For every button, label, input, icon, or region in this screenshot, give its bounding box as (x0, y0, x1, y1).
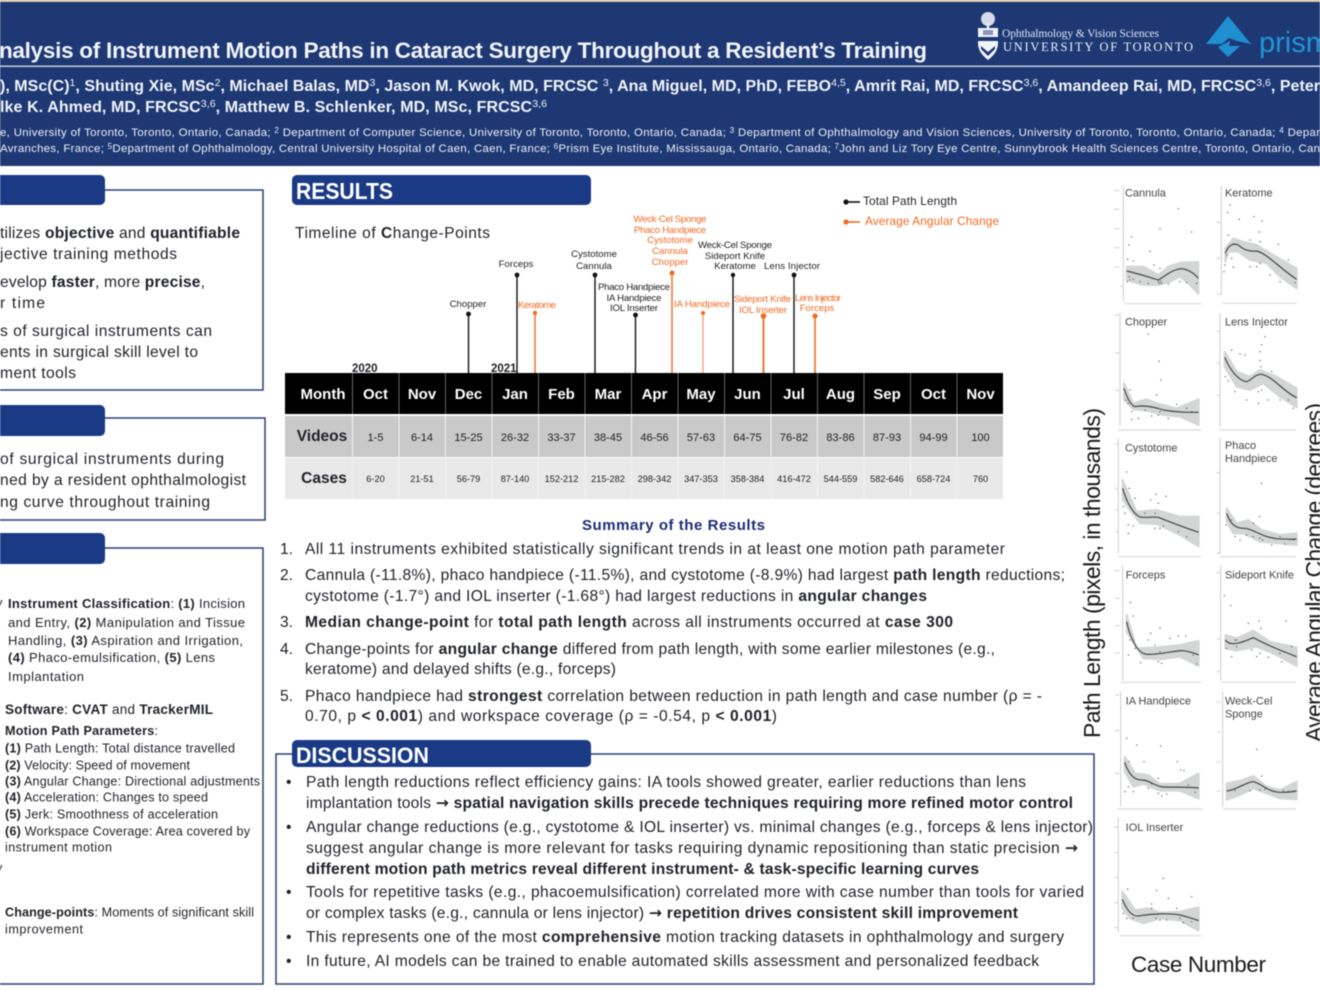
videos row: 76-82 (780, 432, 808, 444)
marker: cystotome and cannula: Cystotome (571, 249, 617, 260)
marker: cystotome and cannula (571, 249, 617, 373)
videos row: Videos (297, 428, 347, 445)
marker: weck-cel sponge, sideport knife, keratome: Keratome (714, 261, 756, 272)
authors: 3 (603, 77, 609, 89)
logo: University of Toronto (978, 12, 1193, 60)
month row: Nov (966, 386, 995, 403)
bullet: path length: • (286, 774, 291, 791)
month row: Aug (826, 386, 855, 403)
authors: , Shuting Xie, MSc (75, 78, 215, 95)
videos row: 94-99 (919, 432, 948, 444)
videos row (297, 428, 990, 445)
item 1: 1. (280, 541, 293, 558)
chart: forceps (1115, 565, 1202, 682)
item 5: 0.70, p < 0.001) and workspace coverage (ρ = -0.54, p < 0.001) (305, 708, 777, 725)
chart: IOL inserter: IOL Inserter (1126, 822, 1184, 834)
small multiple charts: lower (1114, 565, 1297, 936)
chart: phaco handpiece (1217, 438, 1297, 557)
marker: forceps: Forceps (499, 259, 534, 270)
chart: chopper (1115, 313, 1202, 430)
chart: phaco handpiece: Phaco (1225, 440, 1256, 452)
authors: , Amandeep Rai, MD, FRCSC (1038, 78, 1257, 95)
timeline table (285, 373, 1003, 499)
marker: weck-cel sponge, sideport knife, keratome (698, 240, 772, 373)
item 1: All 11 instruments exhibited statistically significant trends in at least one motion path parameter (305, 541, 1005, 558)
marker: weck-cel sponge, sideport knife, keratome: Sideport Knife (705, 251, 765, 262)
videos row: 83-86 (826, 432, 855, 444)
authors: , Matthew B. Schlenker, MD, MSc, FRCSC (216, 99, 533, 116)
chart: forceps: Forceps (1126, 569, 1166, 581)
marker: phaco handpiece, IA handpiece, IOL inserter (598, 282, 670, 373)
cases row: 416-472 (777, 474, 811, 484)
motion path parameters: instrument motion (5, 840, 112, 854)
authors: 3,6 (1256, 77, 1271, 89)
affiliations: 2 (274, 126, 279, 135)
axis label: case number: Case Number (1131, 952, 1266, 977)
bullet: angular change: suggest angular change is more relevant for tasks requiring dynamic repositioning than static precision → (306, 839, 1078, 857)
panel: objective (0, 405, 265, 520)
item 4: keratome) and delayed shifts (e.g., forceps) (305, 661, 616, 678)
affiliations: Prism Eye Institute, Mississauga, Ontario, Canada; (558, 143, 834, 155)
chart: weck-cel sponge (1217, 692, 1297, 809)
bullet: path length (286, 774, 1073, 812)
marker: keratome angular: Keratome (518, 300, 556, 311)
marker: angular stack: Cystotome (647, 235, 693, 246)
affiliations: 6 (554, 142, 559, 151)
cases row: 56-79 (457, 474, 480, 484)
affiliations: Department of Ophthalmology and Vision Sciences, University of Toronto, Toronto, Ontario, Canada; (735, 127, 1279, 139)
marker: chopper: Chopper (450, 299, 487, 310)
change-points definition (0, 861, 254, 936)
videos row: 1-5 (368, 432, 383, 444)
cases row: 215-282 (591, 474, 625, 484)
chart: cystotome (1115, 438, 1202, 557)
chart: keratome (1217, 186, 1297, 303)
authors (0, 77, 1320, 116)
bullet: repetition (286, 884, 1084, 922)
affiliations: Department of Ophthalmology, Central University Hospital of Caen, Caen, France; (112, 143, 553, 155)
motion path parameters: (4) Acceleration: Changes to speed (5, 790, 208, 804)
bullet: future: In future, AI models can be trained to enable automated skills assessment and personalized feedback (306, 953, 1039, 970)
item 4 (280, 641, 995, 678)
month row: Nov (408, 386, 437, 403)
videos row: 87-93 (873, 432, 901, 444)
objective text: ned by a resident ophthalmologist (0, 472, 247, 489)
motion path parameters: (5) Jerk: Smoothness of acceleration (5, 808, 218, 822)
authors: , Jason M. Kwok, MD, FRCSC (375, 78, 603, 95)
affiliations: 7 (835, 142, 840, 151)
heading pill: objective (0, 405, 105, 436)
item 4: 4. (280, 641, 293, 658)
marker: sideport knife and IOL inserter angular: IOL Inserter (739, 305, 788, 316)
authors: 3,6 (1024, 77, 1038, 89)
item 4: Change-points for angular change differed from path length, with some earlier milestones (e.g., (305, 641, 995, 658)
authors: 1 (70, 77, 76, 89)
bullet: angular change: Angular change reductions (e.g., cystotome & IOL inserter) vs. minimal changes (e.g., forceps & lens injector) (306, 819, 1093, 836)
heading: discussion: DISCUSSION (296, 743, 429, 768)
item 2: 2. (280, 567, 293, 584)
bullet: angular change (286, 819, 1093, 878)
heading: results (292, 175, 591, 205)
logo: University of Toronto: UNIVERSITY OF TORONTO (1003, 40, 1193, 54)
item 3: 3. (280, 614, 293, 631)
chart: IA handpiece (1115, 692, 1202, 809)
authors: lke K. Ahmed, MD, FRCSC (0, 99, 201, 116)
marker: lens injector (764, 261, 821, 373)
instrument classification text: and Entry, (2) Manipulation and Tissue (8, 615, 245, 630)
instrument classification text: Implantation (8, 669, 84, 684)
legend: Total Path Length (863, 194, 957, 208)
chart: cannula: Cannula (1125, 188, 1167, 200)
marker: phaco handpiece, IA handpiece, IOL inserter: IA Handpiece (606, 293, 662, 304)
instrument classification text (0, 595, 245, 684)
instrument classification text: (4) Phaco-emulsification, (5) Lens (8, 650, 216, 665)
background text: ment tools (0, 365, 76, 382)
heading: timeline of change-points: Timeline of Change-Points (295, 225, 490, 242)
background text: evelop faster, more precise, (0, 274, 205, 291)
bullet: angular change: different motion path metrics reveal different instrument- & task-specific learning curves (306, 861, 979, 878)
background text (0, 225, 240, 382)
chart: sideport knife: Sideport Knife (1225, 569, 1294, 581)
month row: Mar (595, 386, 621, 403)
videos row: 64-75 (733, 432, 762, 444)
marker: phaco handpiece, IA handpiece, IOL inserter: Phaco Handpiece (598, 282, 670, 293)
chart: weck-cel sponge: Sponge (1225, 709, 1263, 721)
marker: angular stack: Phaco Handpiece (634, 225, 706, 236)
month row: May (686, 386, 716, 403)
marker: sideport knife and IOL inserter angular: Sideport Knife (734, 294, 791, 305)
chart: IOL inserter (1114, 817, 1202, 936)
marker: sideport knife and IOL inserter angular (734, 294, 791, 373)
item 5: 5. (280, 688, 293, 705)
cases row: 152-212 (545, 474, 578, 484)
cases row: Cases (301, 470, 347, 487)
videos row: 38-45 (594, 432, 622, 444)
affiliations: Avranches, France; (0, 143, 104, 155)
month row: Sep (873, 386, 901, 403)
cases row: 298-342 (638, 474, 671, 484)
month row (301, 386, 995, 403)
bullet: dataset: • (286, 929, 291, 946)
chart: cannula (1114, 186, 1202, 304)
videos row: 15-25 (454, 432, 483, 444)
marker: angular stack: Weck-Cel Sponge (634, 214, 706, 225)
item 2 (280, 567, 1065, 605)
cases row: 658-724 (917, 474, 950, 484)
affiliations: John and Liz Tory Eye Centre, Sunnybrook Health Sciences Centre, Toronto, Ontario, Can (839, 143, 1320, 155)
change-points definition: improvement (5, 922, 84, 936)
legend (843, 194, 999, 228)
heading pill: background (0, 175, 105, 205)
bullet: path length: Path length reductions reflect efficiency gains: IA tools showed greater, earlier reductions than lens (306, 774, 1026, 791)
affiliations: Department of Computer Science, University of Toronto, Toronto, Ontario, Canada; (279, 127, 729, 139)
chart: keratome: Keratome (1225, 188, 1273, 200)
objective text: of surgical instruments during (0, 451, 224, 468)
month row: Jul (783, 386, 805, 403)
cases row: 544-559 (824, 474, 857, 484)
software text: Software: CVAT and TrackerMIL (5, 702, 213, 717)
marker: IA handpiece angular: IA Handpiece (674, 299, 730, 310)
videos row: 6-14 (411, 432, 433, 444)
summary list (280, 541, 1065, 725)
change-points definition: Change-points: Moments of significant skill (5, 906, 254, 920)
videos row: 26-32 (501, 432, 529, 444)
panel: methods (0, 533, 263, 984)
affiliations (0, 126, 1320, 155)
authors: 2 (215, 77, 221, 89)
heading pill: methods (0, 533, 105, 564)
logo: Prism (1206, 16, 1320, 59)
motion path parameters: (6) Workspace Coverage: Area covered by (5, 824, 251, 838)
marker: cystotome and cannula: Cannula (576, 261, 613, 272)
chart: IA handpiece: IA Handpiece (1126, 696, 1191, 708)
videos row: 100 (971, 432, 990, 444)
authors: , Michael Balas, MD (220, 78, 369, 95)
marker: lens injector and forceps angular: Lens Injector (795, 293, 842, 304)
cases row: 582-646 (870, 474, 904, 484)
cases row: 760 (973, 474, 988, 484)
axis label: path length: Path Length (pixels, in thousands) (1079, 408, 1105, 738)
background text: r time (0, 295, 45, 312)
bullet: repetition: • (286, 884, 291, 901)
motion path parameters: (1) Path Length: Total distance travelled (5, 742, 235, 756)
year labels (352, 363, 517, 375)
month row: Feb (548, 386, 575, 403)
videos row: 57-63 (687, 432, 715, 444)
authors: , Ana Miguel, MD, PhD, FEBO (609, 78, 831, 95)
cases row: 358-384 (731, 474, 764, 484)
bullet: future: • (286, 953, 291, 970)
bullet: dataset: This represents one of the most comprehensive motion tracking datasets in ophthalmology and surgery (306, 929, 1064, 946)
month row: Apr (642, 386, 668, 403)
motion path parameters: (3) Angular Change: Directional adjustments (5, 774, 260, 788)
month row: Dec (455, 386, 482, 403)
background text: jective training methods (0, 246, 177, 263)
background text: tilizes objective and quantifiable (0, 225, 240, 242)
heading: summary of the results: Summary of the Results (582, 517, 765, 534)
cases row: 21-51 (410, 474, 434, 484)
authors: ), MSc(C) (0, 78, 70, 95)
marker: forceps (499, 259, 534, 373)
marker: lens injector and forceps angular: Forceps (800, 303, 835, 314)
marker: phaco handpiece, IA handpiece, IOL inserter: IOL Inserter (610, 303, 659, 314)
affiliations: 4 (1279, 126, 1284, 135)
marker: keratome angular (518, 300, 556, 373)
marker: weck-cel sponge, sideport knife, keratome: Weck-Cel Sponge (698, 240, 772, 251)
authors: 3 (370, 77, 376, 89)
item 5 (280, 688, 1042, 725)
discussion bullets (286, 774, 1093, 970)
marker: chopper (450, 299, 487, 373)
panel: discussion (276, 740, 1094, 984)
month row: Oct (363, 386, 388, 403)
motion path parameters: (2) Velocity: Speed of movement (5, 758, 190, 772)
affiliations: 3 (730, 126, 735, 135)
instrument classification text: Handling, (3) Aspiration and Irrigation, (8, 633, 243, 648)
chart: sideport knife (1217, 565, 1297, 682)
item 2: cystotome (-1.7°) and IOL inserter (-1.68°) had largest reductions in angular changes (305, 588, 927, 605)
instrument classification text: Instrument Classification: (1) Incision (8, 596, 245, 611)
bullet: angular change: • (286, 819, 291, 836)
chart: weck-cel sponge: Weck-Cel (1225, 696, 1272, 708)
heading: discussion (292, 740, 591, 768)
cases row (301, 470, 988, 487)
objective text: ng curve throughout training (0, 494, 210, 511)
small multiple charts: upper (1114, 186, 1297, 557)
month row: Jun (734, 386, 761, 403)
chart: chopper: Chopper (1125, 317, 1167, 329)
affiliations: e, University of Toronto, Toronto, Ontario, Canada; (0, 127, 271, 139)
bullet: repetition: Tools for repetitive tasks (e.g., phacoemulsification) correlated more with case number than tools for varied (306, 884, 1084, 901)
marker: angular stack: Chopper (652, 257, 689, 268)
timeline change-point markers (450, 214, 842, 373)
cases row: 347-353 (684, 474, 718, 484)
logo: University of Toronto: Ophthalmology & Vision Sciences (1002, 28, 1160, 40)
month row: Month (301, 386, 345, 403)
heading: results: RESULTS (296, 178, 393, 204)
item 2: Cannula (-11.8%), phaco handpiece (-11.5%), and cystotome (-8.9%) had largest path length reductions; (305, 567, 1065, 584)
year labels: 2021 (491, 363, 517, 375)
authors: , Amrit Rai, MD, FRCSC (846, 78, 1024, 95)
marker: lens injector: Lens Injector (764, 261, 821, 272)
motion path parameters: Motion Path Parameters: (5, 724, 158, 738)
chart: phaco handpiece: Handpiece (1225, 453, 1278, 465)
chart: lens injector: Lens Injector (1225, 317, 1288, 329)
cases row: 87-140 (501, 474, 529, 484)
chart: cystotome: Cystotome (1125, 443, 1177, 455)
affiliations: 5 (108, 142, 113, 151)
videos row: 46-56 (640, 432, 669, 444)
authors: , Peter (1271, 78, 1320, 95)
item 5: Phaco handpiece had strongest correlation between reduction in path length and case number (ρ = - (305, 688, 1042, 705)
legend: Average Angular Change (865, 214, 999, 228)
marker: angular stack: Cannula (652, 246, 689, 257)
title: Analysis of Instrument Motion Paths in Cataract Surgery Throughout a Resident’s Training (0, 38, 927, 63)
marker: IA handpiece angular (674, 299, 730, 373)
month row: Oct (921, 386, 946, 403)
cases row: 6-20 (366, 474, 385, 484)
motion path parameters (5, 724, 260, 854)
authors: 3,6 (201, 98, 216, 110)
month row: Jan (502, 386, 528, 403)
year labels: 2020 (352, 363, 378, 375)
authors: 3,6 (532, 98, 547, 110)
header banner (0, 0, 1320, 166)
background text: s of surgical instruments can (0, 323, 212, 340)
background text: ents in surgical skill level to (0, 344, 198, 361)
marker: angular stack (634, 214, 706, 373)
panel: background (0, 175, 263, 390)
affiliations: Depar (1284, 127, 1320, 139)
objective text (0, 451, 247, 511)
videos row: 33-37 (547, 432, 576, 444)
marker: lens injector and forceps angular (795, 293, 842, 373)
chart: lens injector (1217, 313, 1297, 430)
item 3: Median change-point for total path length across all instruments occurred at case 300 (305, 614, 953, 631)
bullet: path length: implantation tools → spatial navigation skills precede techniques requiring more refined motor control (306, 794, 1073, 812)
bullet: repetition: or complex tasks (e.g., cannula or lens injector) → repetition drives consistent skill improvement (306, 904, 1018, 922)
authors: 4,5 (831, 77, 846, 89)
